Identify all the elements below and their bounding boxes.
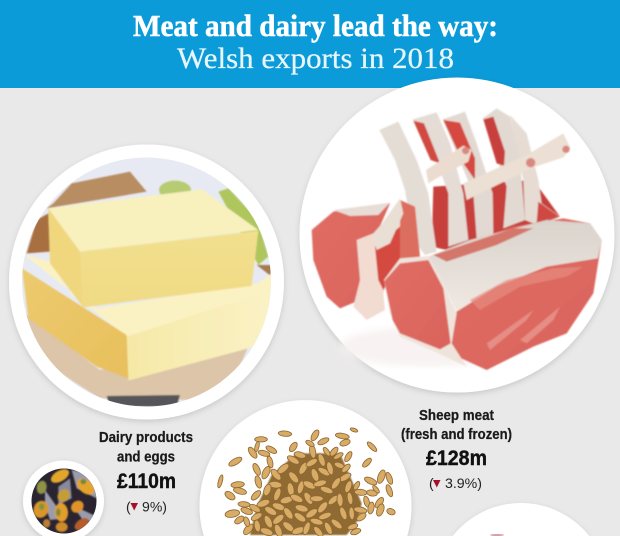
far cut (312, 203, 390, 308)
main loin (428, 218, 602, 370)
upper block (48, 189, 258, 252)
front cut face (384, 256, 467, 367)
label: sheep meat: (fresh and frozen) (401, 426, 512, 443)
label: sheep meat: Sheep meat (419, 407, 494, 424)
red backing between ribs (432, 180, 560, 250)
change: sheep: 3.9%) (445, 475, 482, 491)
photo: mussels (31, 466, 97, 534)
value: dairy: £110m (117, 470, 176, 493)
label: dairy products and eggs (99, 429, 193, 514)
paper (20, 310, 248, 400)
panel: sheep meat photo (300, 78, 614, 392)
panel: cheese photo (9, 144, 284, 420)
change: dairy (126, 498, 167, 514)
label: dairy products and eggs: and eggs (117, 448, 175, 466)
grapes (159, 181, 191, 199)
change: sheep (429, 475, 482, 491)
panel: barley photo (200, 400, 412, 536)
crackers (47, 172, 147, 208)
value: sheep: £128m (426, 447, 487, 470)
panel: mussels photo (23, 461, 104, 536)
change: sheep: ( (429, 475, 434, 491)
change: dairy: ( (126, 498, 131, 514)
photo: cheese blocks (20, 155, 275, 410)
title: Welsh exports in 2018 (177, 42, 454, 75)
photo: barley grains (217, 427, 396, 536)
front rib (379, 122, 437, 255)
header band (0, 0, 620, 88)
label: dairy products and eggs: Dairy products (99, 429, 193, 446)
title (133, 8, 498, 75)
photo: meat edge (490, 534, 504, 536)
photo: rack of lamb (312, 108, 602, 370)
back ribs (510, 115, 560, 223)
change: dairy: 9%) (142, 498, 167, 514)
panel: partial bottom right photo (453, 503, 589, 536)
lower block (25, 255, 272, 337)
label: sheep meat (401, 407, 512, 491)
cross bones (426, 146, 472, 183)
title: Meat and dairy lead the way: (133, 8, 498, 43)
